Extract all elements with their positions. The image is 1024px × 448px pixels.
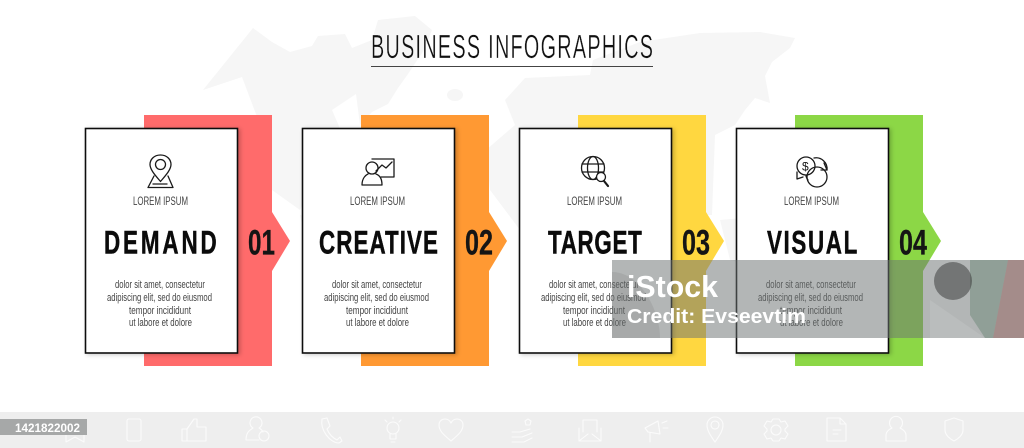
body text: adipiscing elit, sed do eiusmod xyxy=(541,292,646,304)
body text xyxy=(758,279,863,329)
number: 02 xyxy=(465,224,493,262)
heading: TARGET xyxy=(548,225,642,260)
icon: coins xyxy=(797,157,827,187)
number: 04 xyxy=(899,224,927,262)
body text: ut labore et dolore xyxy=(780,317,843,329)
body text: ut labore et dolore xyxy=(129,317,192,329)
title: BUSINESS INFOGRAPHICS xyxy=(371,28,653,65)
arrow block: red xyxy=(144,115,290,366)
label: LOREM IPSUM xyxy=(350,194,405,208)
body text: dolor sit amet, consectetur xyxy=(766,279,856,291)
number: 03 xyxy=(682,224,710,262)
body text: dolor sit amet, consectetur xyxy=(332,279,422,291)
arrow block: yellow xyxy=(578,115,724,366)
panel: creative xyxy=(302,115,507,366)
icon: globe with magnifier xyxy=(582,156,608,186)
heading: CREATIVE xyxy=(319,225,438,260)
watermark band xyxy=(612,260,1024,338)
body text xyxy=(107,279,212,329)
body text xyxy=(541,279,646,329)
icon: coins: $ xyxy=(802,160,809,174)
heading: DEMAND xyxy=(104,225,217,260)
label: LOREM IPSUM xyxy=(567,194,622,208)
body text: dolor sit amet, consectetur xyxy=(115,279,205,291)
label: LOREM IPSUM xyxy=(133,194,188,208)
card xyxy=(302,128,454,353)
body text: tempor incididunt xyxy=(563,305,625,317)
number: 01 xyxy=(248,224,275,262)
body text: tempor incididunt xyxy=(346,305,408,317)
body text: adipiscing elit, sed do eiusmod xyxy=(324,292,429,304)
image id tag: 1421822002 xyxy=(15,423,80,435)
arrow block: green xyxy=(795,115,941,366)
card xyxy=(520,128,672,353)
panel: target xyxy=(520,115,724,366)
icon: map pin xyxy=(148,155,173,188)
body text: tempor incididunt xyxy=(129,305,191,317)
strip icons xyxy=(66,416,963,443)
world map watermark xyxy=(203,16,795,330)
body text: ut labore et dolore xyxy=(563,317,626,329)
panel: visual xyxy=(736,115,941,366)
watermark circle xyxy=(934,262,972,300)
arrow block: orange xyxy=(361,115,507,366)
body text: adipiscing elit, sed do eiusmod xyxy=(758,292,863,304)
watermark credit: Credit: Evseevtim xyxy=(627,306,806,328)
icon strip xyxy=(0,412,1024,448)
panel: demand xyxy=(86,115,290,366)
label: LOREM IPSUM xyxy=(784,194,839,208)
body text: tempor incididunt xyxy=(780,305,842,317)
body text xyxy=(324,279,429,329)
card xyxy=(86,128,238,353)
card xyxy=(736,128,888,353)
image id tag xyxy=(0,419,87,435)
heading: VISUAL xyxy=(767,225,857,260)
body text: adipiscing elit, sed do eiusmod xyxy=(107,292,212,304)
icon: presenter with chart xyxy=(362,159,394,185)
watermark logo: iStock xyxy=(627,269,719,304)
body text: ut labore et dolore xyxy=(346,317,409,329)
body text: dolor sit amet, consectetur xyxy=(549,279,639,291)
